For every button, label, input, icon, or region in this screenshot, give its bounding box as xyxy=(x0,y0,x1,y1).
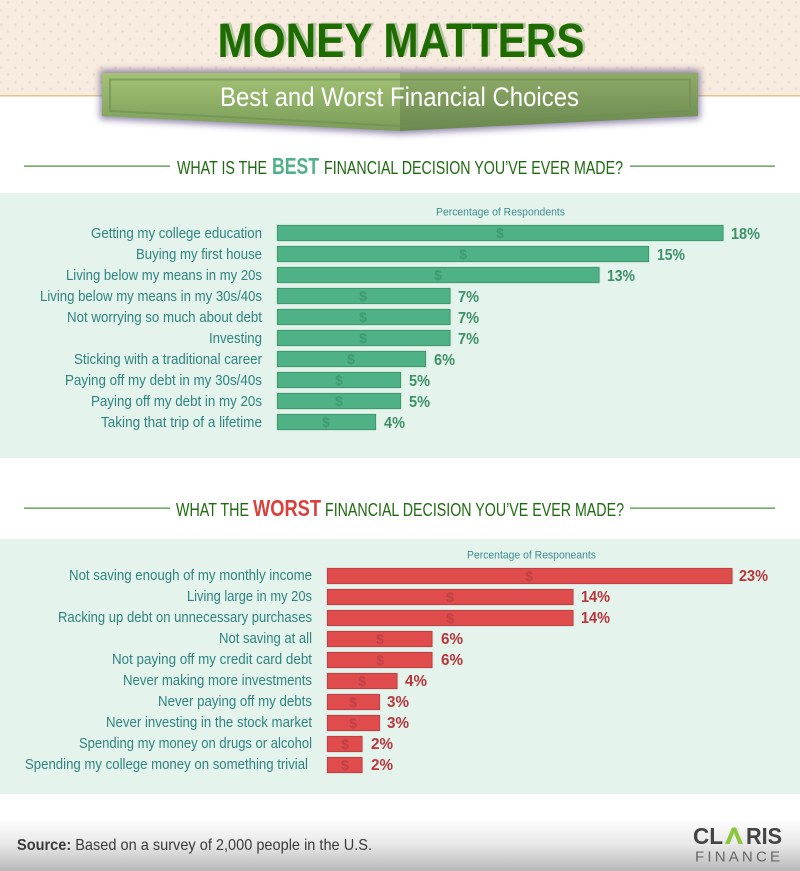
row: racking up debt xyxy=(58,610,610,627)
row: not saving enough: $ xyxy=(525,568,533,584)
panel: best decisions chart xyxy=(0,193,800,458)
row: trip of a lifetime: Taking that trip of a lifetime xyxy=(101,415,262,431)
row: stock market: $ xyxy=(349,715,357,731)
row: paying off debts: 3% xyxy=(387,694,409,711)
row: paying off debts: $ xyxy=(349,694,357,710)
row: below means 30s/40s: $ xyxy=(359,288,367,304)
row: below means 30s/40s: 7% xyxy=(458,289,479,306)
row: paying off debts xyxy=(158,694,409,711)
row: below means 20s: 13% xyxy=(607,268,635,285)
title: MONEY MATTERS xyxy=(220,14,587,67)
row: not saving at all xyxy=(219,631,463,648)
subtitle banner xyxy=(100,70,700,134)
row: trip of a lifetime: $ xyxy=(322,414,330,430)
logo: Claris Finance: FINANCE xyxy=(695,848,780,866)
row: below means 20s: $ xyxy=(434,267,442,283)
panel: worst decisions chart xyxy=(0,539,800,794)
banner text: Best and Worst Financial Choices xyxy=(220,82,579,112)
row: investing: $ xyxy=(359,330,367,346)
row: something trivial: 2% xyxy=(371,757,393,774)
row: living large: $ xyxy=(446,589,454,605)
row: not worrying: 7% xyxy=(458,310,479,327)
header background xyxy=(0,0,800,96)
row: below means 20s xyxy=(66,267,635,285)
row: not saving at all: Not saving at all xyxy=(219,631,312,647)
row: not worrying: $ xyxy=(359,309,367,325)
row: not saving enough: 23% xyxy=(739,568,768,585)
row: living large: 14% xyxy=(581,589,610,606)
row: not saving enough xyxy=(69,568,768,585)
row: investing: 7% xyxy=(458,331,479,348)
row: college education: $ xyxy=(496,225,504,241)
row: racking up debt: Racking up debt on unnecessary purchases xyxy=(58,610,312,626)
row: traditional career: Sticking with a traditional career xyxy=(74,352,262,368)
row: not worrying: Not worrying so much about debt xyxy=(67,310,262,326)
row: paying off debts: Never paying off my debts xyxy=(158,694,312,710)
row: living large xyxy=(187,589,610,606)
row: debt 30s/40s: $ xyxy=(335,372,343,388)
row: investing: Investing xyxy=(209,331,262,347)
row: below means 30s/40s: Living below my means in my 30s/40s xyxy=(40,289,262,305)
axis label: Percentage of Respondents xyxy=(436,206,565,218)
heading: best decision: WHAT IS THE xyxy=(177,158,267,178)
row: drugs or alcohol: $ xyxy=(341,736,349,752)
heading: worst decision: WORST xyxy=(253,495,321,521)
footer band xyxy=(0,818,800,871)
row: debt 30s/40s xyxy=(65,372,430,390)
row: more investments: 4% xyxy=(405,673,427,690)
row: not saving at all: $ xyxy=(376,631,384,647)
row: traditional career: 6% xyxy=(434,352,455,369)
row: stock market: 3% xyxy=(387,715,409,732)
row: first house: Buying my first house xyxy=(136,247,262,263)
title: MONEY MATTERS xyxy=(218,15,584,68)
logo: Claris Finance: CL xyxy=(693,823,723,849)
row: something trivial: $ xyxy=(341,757,349,773)
row: racking up debt: $ xyxy=(446,610,454,626)
source note: Source: Based on a survey of 2,000 people in the U.S. xyxy=(17,837,372,854)
row: more investments: Never making more investments xyxy=(123,673,312,689)
row: college education xyxy=(91,225,760,243)
row: credit card debt: 6% xyxy=(441,652,463,669)
heading: worst decision: FINANCIAL DECISION YOU’VE EVER MADE? xyxy=(325,500,624,520)
heading: worst decision xyxy=(24,495,775,521)
row: first house: $ xyxy=(459,246,467,262)
row: below means 30s/40s xyxy=(40,288,479,306)
row: not saving at all: 6% xyxy=(441,631,463,648)
row: debt 30s/40s: Paying off my debt in my 30s/40s xyxy=(65,373,262,389)
row: debt 20s: Paying off my debt in my 20s xyxy=(91,394,262,410)
row: not worrying xyxy=(67,309,479,327)
heading: worst decision: WHAT THE xyxy=(176,500,249,520)
row: trip of a lifetime xyxy=(101,414,405,432)
heading: best decision xyxy=(24,153,775,179)
row: college education: 18% xyxy=(731,226,760,243)
heading: best decision: BEST xyxy=(272,153,319,179)
row: drugs or alcohol: Spending my money on drugs or alcohol xyxy=(79,736,312,752)
row: traditional career xyxy=(74,351,455,369)
row: below means 20s: Living below my means in my 20s xyxy=(66,268,262,284)
row: first house: 15% xyxy=(657,247,685,264)
row: more investments: $ xyxy=(358,673,366,689)
row: credit card debt xyxy=(112,652,463,669)
logo: Claris Finance xyxy=(693,823,782,866)
row: first house xyxy=(136,246,685,264)
row: living large: Living large in my 20s xyxy=(187,589,312,605)
row: drugs or alcohol: 2% xyxy=(371,736,393,753)
row: credit card debt: $ xyxy=(376,652,384,668)
row: racking up debt: 14% xyxy=(581,610,610,627)
row: something trivial: Spending my college money on something trivial xyxy=(25,757,308,773)
row: more investments xyxy=(123,673,427,690)
row: credit card debt: Not paying off my credit card debt xyxy=(112,652,312,668)
row: debt 30s/40s: 5% xyxy=(409,373,430,390)
row: investing xyxy=(209,330,479,348)
row: debt 20s: $ xyxy=(335,393,343,409)
heading: best decision: FINANCIAL DECISION YOU’VE EVER MADE? xyxy=(324,158,623,178)
row: not saving enough: Not saving enough of my monthly income xyxy=(69,568,312,584)
row: traditional career: $ xyxy=(347,351,355,367)
row: stock market: Never investing in the stock market xyxy=(106,715,312,731)
row: trip of a lifetime: 4% xyxy=(384,415,405,432)
axis label: Percentage of Responeants xyxy=(467,550,596,562)
row: debt 20s: 5% xyxy=(409,394,430,411)
logo: Claris Finance: RIS xyxy=(746,823,782,849)
row: debt 20s xyxy=(91,393,430,411)
row: college education: Getting my college education xyxy=(91,226,262,242)
